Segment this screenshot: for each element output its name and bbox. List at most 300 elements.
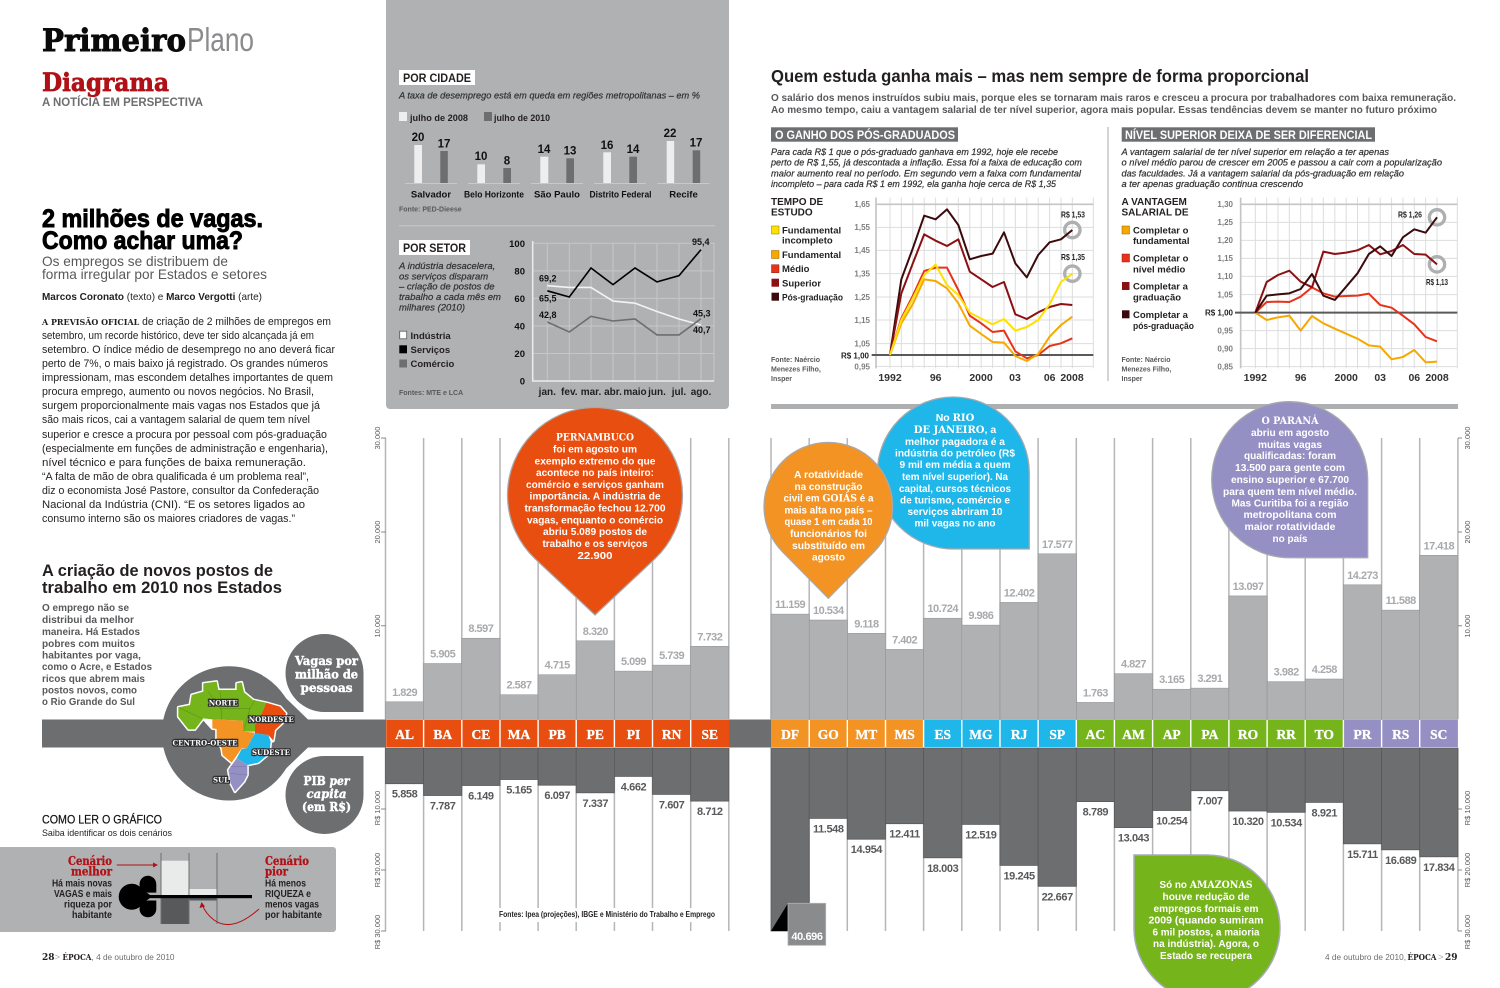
footer left: , 4 de outubro de 2010 <box>92 952 175 962</box>
footer right: ÉPOCA <box>1408 951 1437 963</box>
callout: Paraná: ensino superior e 67.700 <box>1231 474 1349 486</box>
footer right <box>1325 951 1458 963</box>
worse scenario text: pior <box>265 865 289 879</box>
state tiles: BA <box>433 727 452 742</box>
bar chart: vagas por milhão de pessoas: 4.827 <box>1121 659 1146 671</box>
callout tag: DF off-scale value: 40.696 <box>791 931 823 943</box>
line chart: por setor: mar. <box>581 387 602 398</box>
legend: vantagem salarial: Completar a <box>1133 310 1189 321</box>
line chart: vantagem salarial: 0,85 <box>1217 362 1234 372</box>
worse scenario text: Há menos <box>265 878 306 890</box>
subheading: Os empregos se distribuem de <box>42 253 228 269</box>
chart intro text: O emprego não se <box>42 602 129 614</box>
worse scenario text <box>265 854 322 921</box>
line chart: por setor: jul. <box>671 387 686 398</box>
legend: tempo de estudo <box>771 197 843 304</box>
description <box>770 147 1082 190</box>
state tiles: RN <box>662 727 682 742</box>
callout: Rio de Janeiro: melhor pagadora é a <box>905 436 1005 448</box>
footer left: 28 <box>42 953 55 963</box>
line chart: ganho por escolaridade: 1,45 <box>854 246 871 255</box>
line chart: por setor: 42,8 <box>539 310 557 320</box>
callout: Paraná: abriu em agosto <box>1251 427 1329 439</box>
state tiles: AM <box>1122 727 1145 742</box>
better scenario text: Há mais novas <box>52 878 112 890</box>
panel: unemployment <box>386 0 729 409</box>
body text: setembro, um recorde histórico, deve ter sido alcançada já em <box>42 330 314 342</box>
source: PED-Dieese: Fonte: PED-Dieese <box>399 207 462 214</box>
callout: Rio de Janeiro: tem nível superior). Na <box>902 471 1008 483</box>
panel: pós-graduados <box>770 127 1093 384</box>
line chart: ganho por escolaridade: 1992 <box>878 372 902 384</box>
footer right: > <box>1438 952 1444 963</box>
legend bubble: Vagas por milhão de pessoas: milhão de <box>295 668 358 682</box>
state tiles: RO <box>1238 727 1258 742</box>
callout: Paraná: Mas Curitiba foi a região <box>1232 498 1348 510</box>
legend: vantagem salarial: Completar o <box>1133 254 1189 264</box>
description: a ter apenas graduação continua crescendo <box>1122 179 1303 190</box>
byline: Marcos Coronato (texto) e Marco Vergotti (arte) <box>42 291 262 303</box>
intro: education and pay: O salário dos menos instruídos subiu mais, porque eles se tornaram mais raros e cresceu a procura por trabalhadores com baixa remuneração. <box>771 92 1456 104</box>
legend: tempo de estudo: ESTUDO <box>771 208 813 218</box>
line chart: ganho por escolaridade: 1,55 <box>854 223 871 232</box>
state tiles: PE <box>587 727 604 742</box>
description: por setor: – criação de postos de <box>398 282 495 292</box>
worse scenario text: Cenário <box>265 854 309 868</box>
callout tag: DF off-scale value <box>771 903 826 945</box>
body text: nível técnico e para funções de baixa remuneração. <box>42 457 306 469</box>
callout: Pernambuco: PERNAMBUCO <box>556 433 634 444</box>
axis: upper left scale: 10.000 <box>373 615 382 637</box>
line chart: vantagem salarial: 1,20 <box>1217 236 1234 245</box>
bar chart: por cidade: Belo Horizonte <box>464 190 524 200</box>
callout: Pernambuco: trabalho e os serviços <box>542 538 648 550</box>
callout: Goiás: agosto <box>812 552 845 564</box>
bar chart: vagas por milhão de pessoas: 4.715 <box>545 660 570 672</box>
line chart: ganho por escolaridade: 1,25 <box>854 293 871 302</box>
description: Para cada R$ 1 que o pós-graduado ganhava em 1992, hoje ele recebe <box>771 147 1058 158</box>
footer right: 29 <box>1445 953 1458 963</box>
description: por setor <box>398 261 501 313</box>
legend: vantagem salarial: Completar o <box>1133 226 1189 236</box>
legend: vantagem salarial: pós-graduação <box>1133 321 1194 332</box>
line chart: por setor: 0 <box>520 376 525 388</box>
line chart: ganho por escolaridade: 2000 <box>969 372 993 384</box>
callout: Rio de Janeiro: serviços abriram 10 <box>908 506 1003 518</box>
legend: years: julho de 2008 <box>409 113 468 124</box>
bar chart: por cidade: Recife <box>669 190 698 200</box>
bar chart: vagas por milhão de pessoas: 5.905 <box>430 648 456 660</box>
chart heading: states: A criação de novos postos de <box>42 562 273 580</box>
axis: lower right scale: R$ 30.000 <box>1463 915 1472 949</box>
callout: Goiás: mais alta no país – <box>784 504 873 516</box>
callout: Goiás: funcionários foi <box>790 528 867 540</box>
callout: Pernambuco: foi em agosto um <box>553 444 637 456</box>
bar chart: por cidade: 20 <box>412 132 424 144</box>
how to read heading <box>42 812 172 839</box>
central axis band <box>42 720 771 748</box>
callout: Rio de Janeiro: de turismo, comércio e <box>900 494 1010 506</box>
heading: por setor: POR SETOR <box>403 241 466 255</box>
state tiles: AP <box>1163 727 1181 742</box>
description: por setor: os serviços disparam <box>399 271 488 282</box>
legend: vantagem salarial: nível médio <box>1133 264 1185 276</box>
bar chart: vagas por milhão de pessoas: 14.273 <box>1347 570 1378 582</box>
description: incompleto – para cada R$ 1 em 1992, ela ganha hoje cerca de R$ 1,35 <box>771 179 1057 190</box>
bar chart: PIB per capita: 7.007 <box>1197 796 1223 808</box>
subheading: forma irregular por Estados e setores <box>42 266 267 282</box>
bar chart: vagas por milhão de pessoas: 3.291 <box>1197 673 1223 685</box>
bar chart: PIB per capita: 7.607 <box>659 799 685 811</box>
bar chart: vagas por milhão de pessoas: 17.418 <box>1423 540 1454 552</box>
section title: Diagrama: A NOTÍCIA EM PERSPECTIVA <box>42 94 203 109</box>
how to read heading: Saiba identificar os dois cenários <box>42 828 172 839</box>
line chart: ganho por escolaridade: 06 <box>1044 372 1056 384</box>
legend bubble: PIB per capita: capita <box>306 787 346 801</box>
bar chart: vagas por milhão de pessoas: 13.097 <box>1233 581 1264 593</box>
legend: vantagem salarial <box>1122 197 1194 332</box>
bar chart: por cidade: 17 <box>690 138 702 150</box>
callout: Amazonas: 6 mil postos, a maioria <box>1152 926 1260 938</box>
callout: Paraná: qualificadas: foram <box>1244 450 1336 462</box>
callout: Rio de Janeiro: mil vagas no ano <box>914 518 996 530</box>
line chart: vantagem salarial: 2000 <box>1335 372 1358 384</box>
line chart: vantagem salarial: R$ 1,26 <box>1398 209 1422 219</box>
chart heading: states <box>42 562 282 597</box>
legend: sectors <box>399 331 455 370</box>
description: por setor: A indústria desacelera, <box>398 261 495 272</box>
how to read heading: COMO LER O GRÁFICO <box>42 812 162 826</box>
bar chart: por cidade <box>405 128 709 200</box>
bar chart: vagas por milhão de pessoas: 3.982 <box>1274 667 1299 679</box>
bar chart: vagas por milhão de pessoas: 5.739 <box>659 650 684 662</box>
axis: lower left scale: R$ 20.000 <box>373 853 382 887</box>
intro: education and pay: Ao mesmo tempo, caiu a vantagem salarial de ter nível superior, agora mais popular. Essas tendências devem se manter no futuro próximo <box>771 104 1437 116</box>
chart intro text: habitantes por vaga, <box>42 650 141 662</box>
line chart: vantagem salarial: 1,30 <box>1217 200 1234 209</box>
axis: upper left scale: 20.000 <box>373 521 382 543</box>
bar chart: PIB per capita: 10.534 <box>1271 817 1303 829</box>
description: por setor: milhares (2010) <box>399 302 465 313</box>
legend: vantagem salarial: fundamental <box>1133 236 1189 247</box>
bar chart: vagas por milhão de pessoas: 11.159 <box>775 599 805 611</box>
bar chart: PIB per capita: 6.149 <box>468 790 494 802</box>
bar chart: vagas por milhão de pessoas: 1.829 <box>392 687 417 699</box>
legend bubble: PIB per capita: PIB per <box>304 774 351 788</box>
state tiles: SP <box>1049 727 1065 742</box>
callout: Rio de Janeiro: DE JANEIRO, a <box>914 424 996 436</box>
line chart: vantagem salarial: 96 <box>1295 372 1307 384</box>
axis: lower right scale <box>1458 791 1472 949</box>
bar chart: PIB per capita <box>386 748 1458 931</box>
state tiles: PI <box>627 727 640 742</box>
chart intro text: pobres com muitos <box>42 638 135 650</box>
line chart: vantagem salarial: 1,15 <box>1217 254 1234 263</box>
axis: upper right scale: 10.000 <box>1463 615 1472 637</box>
panel: how to read <box>0 847 336 932</box>
callout: Pernambuco: vagas, enquanto o comércio <box>527 514 663 526</box>
line chart: ganho por escolaridade: 1,15 <box>854 316 871 325</box>
line chart: ganho por escolaridade <box>841 198 1093 384</box>
legend bubble: PIB per capita <box>286 756 364 834</box>
callout: Rio de Janeiro: No RIO <box>936 412 975 424</box>
source: Fonte: Naércio <box>1122 357 1171 364</box>
state tiles: MG <box>969 727 993 742</box>
bar chart: PIB per capita: 12.519 <box>965 829 997 841</box>
line chart: ganho por escolaridade: 96 <box>930 372 942 384</box>
legend: vantagem salarial: graduação <box>1133 292 1181 304</box>
line chart: por setor: fev. <box>561 387 578 398</box>
headline: 2 milhões de vagas. <box>42 205 263 233</box>
source: Insper <box>771 376 792 383</box>
bar chart: PIB per capita: 8.712 <box>697 806 723 818</box>
callout: Rio de Janeiro: indústria do petróleo (R$ <box>895 448 1015 460</box>
state tiles: SC <box>1430 727 1447 742</box>
bar chart: vagas por milhão de pessoas: 8.597 <box>468 623 494 635</box>
bar chart: vagas por milhão de pessoas: 3.165 <box>1159 674 1185 686</box>
legend: years: julho de 2010 <box>493 113 550 124</box>
body text: são mais ricos, cai a vantagem salarial de quem tem nível <box>42 414 310 426</box>
headline <box>42 205 263 255</box>
bar chart: vagas por milhão de pessoas: 5.099 <box>621 656 646 668</box>
state tiles: MA <box>508 727 530 742</box>
bar chart: vagas por milhão de pessoas: 7.732 <box>697 631 723 643</box>
bar chart: PIB per capita: 16.689 <box>1385 855 1417 867</box>
legend: tempo de estudo: Superior <box>782 278 821 290</box>
bar chart: vagas por milhão de pessoas: 17.577 <box>1042 539 1073 551</box>
line chart: por setor: 65,5 <box>539 294 557 304</box>
line chart: vantagem salarial: 1,10 <box>1217 272 1234 281</box>
heading: NÍVEL SUPERIOR DEIXA DE SER DIFERENCIAL <box>1125 127 1372 142</box>
line chart: ganho por escolaridade: 1,65 <box>854 200 871 209</box>
body text: impressionam, mas escondem detalhes importantes de quem <box>42 372 333 384</box>
map labels: SUL <box>213 776 230 784</box>
body text: Nacional da Indústria (CNI). “E os setores ligados ao <box>42 499 305 511</box>
callout: Pernambuco: acontece no país inteiro: <box>536 467 654 479</box>
bar chart: por cidade: 16 <box>601 140 613 152</box>
map labels: CENTRO-OESTE <box>172 739 238 748</box>
chart intro text: postos novos, como <box>42 684 137 696</box>
bar chart: vagas por milhão de pessoas: 9.986 <box>968 610 994 622</box>
bar chart: por cidade: 8 <box>504 156 511 168</box>
source note: Fontes: Ipea (projeções), IBGE e Ministério do Trabalho e Emprego <box>499 910 715 919</box>
body text: “A falta de mão de obra qualificada é um problema real”, <box>42 471 309 483</box>
bar chart: por cidade: Distrito Federal <box>590 190 652 200</box>
callout: Pernambuco <box>508 408 683 615</box>
line chart: por setor: 100 <box>509 239 525 250</box>
heading: por cidade: POR CIDADE <box>403 71 471 85</box>
line chart: por setor: 69,2 <box>539 274 557 284</box>
worse scenario text: RIQUEZA e <box>265 889 311 900</box>
callout: Goiás: civil em GOIÁS é a <box>784 493 874 505</box>
callout: Goiás: na construção <box>794 481 862 493</box>
subheading <box>42 253 267 282</box>
chart intro text: distribui da melhor <box>42 614 134 626</box>
body text: (especialmente em funções de administração e engenharia), <box>42 443 328 455</box>
callout: Paraná: 13.500 para gente com <box>1235 462 1345 474</box>
title: education and pay: Quem estuda ganha mais – mas nem sempre de forma proporcional <box>771 66 1309 86</box>
state tiles <box>386 720 1458 747</box>
better scenario text: riqueza por <box>64 900 112 910</box>
description: o nível médio parou de crescer em 2005 e passou a cair com a popularização <box>1122 158 1442 169</box>
legend bubble: PIB per capita: (em R$) <box>302 800 351 814</box>
callout: Amazonas: empregos formais em <box>1154 903 1258 915</box>
bar chart: vagas por milhão de pessoas <box>386 539 1458 720</box>
section header: Primeiro Plano: Primeiro <box>42 23 186 59</box>
line chart: ganho por escolaridade: 1,35 <box>854 270 871 278</box>
bar chart: PIB per capita: 12.411 <box>889 829 920 841</box>
callout: Paraná: maior rotatividade <box>1244 521 1336 533</box>
bar chart: PIB per capita: 10.320 <box>1232 816 1264 828</box>
arrow: better scenario <box>117 862 158 868</box>
state tiles: PA <box>1201 727 1219 742</box>
callout: Amazonas: Só no AMAZONAS <box>1160 879 1252 891</box>
section header: Primeiro Plano <box>42 21 254 59</box>
better scenario text: Cenário <box>68 854 112 868</box>
state tiles: CE <box>472 727 490 742</box>
source: Insper <box>1122 376 1143 383</box>
line chart: ganho por escolaridade: 03 <box>1009 372 1021 384</box>
bar chart: PIB per capita: 14.954 <box>851 844 883 856</box>
legend: tempo de estudo: TEMPO DE <box>771 197 824 208</box>
bar chart: PIB per capita: 5.165 <box>506 784 532 796</box>
bar chart: vagas por milhão de pessoas: 10.534 <box>813 605 845 617</box>
headline: Como achar uma? <box>42 227 243 255</box>
source <box>1122 357 1171 383</box>
line chart: vantagem salarial: 06 <box>1408 372 1420 384</box>
description: A vantagem salarial de ter nível superior em relação a ter apenas <box>1121 147 1389 158</box>
worse scenario text: por habitante <box>265 910 322 921</box>
state tiles: RJ <box>1011 727 1028 742</box>
description: por cidade: A taxa de desemprego está em queda em regiões metropolitanas – em % <box>398 90 701 102</box>
source <box>771 357 821 383</box>
legend: vantagem salarial: Completar a <box>1133 282 1189 292</box>
body text: procura emprego, aumento ou novos negócios. No Brasil, <box>42 386 314 398</box>
bar chart: por cidade: 13 <box>564 146 576 158</box>
better scenario text: habitante <box>72 910 112 921</box>
bar chart: PIB per capita: 18.003 <box>927 863 959 875</box>
line chart: por setor: 40 <box>514 322 525 332</box>
callout: Pernambuco: 22.900 <box>578 550 613 562</box>
bar chart: PIB per capita: 13.043 <box>1118 833 1149 845</box>
line chart: por setor: maio <box>623 387 647 398</box>
description: perto de R$ 1,55, já descontada a inflação. Essa foi a faixa de educação com <box>770 158 1082 169</box>
bar chart: vagas por milhão de pessoas: 4.258 <box>1312 664 1337 676</box>
chart intro text: como o Acre, e Estados <box>42 661 152 673</box>
state tiles: PR <box>1354 727 1372 742</box>
axis: lower left scale: R$ 30.000 <box>373 915 382 949</box>
callout: Goiás: A rotatividade <box>794 469 863 481</box>
legend: tempo de estudo: Pós-graduação <box>782 292 843 304</box>
state tiles: AC <box>1086 727 1105 742</box>
line chart: por setor: abr. <box>604 387 622 398</box>
body text: setembro. O índice médio de desemprego no ano deverá ficar <box>42 344 335 356</box>
callout: Amazonas: na indústria). Agora, o <box>1153 938 1259 950</box>
state tiles: GO <box>818 727 839 742</box>
line chart: por setor: 95,4 <box>692 237 710 247</box>
bar chart: vagas por milhão de pessoas: 10.724 <box>927 603 959 615</box>
bar chart: vagas por milhão de pessoas: 1.763 <box>1083 687 1108 699</box>
callout: Pernambuco: abriu 5.089 postos de <box>543 526 647 538</box>
line chart: ganho por escolaridade: R$ 1,00 <box>841 352 870 360</box>
legend: tempo de estudo: Fundamental <box>782 250 841 261</box>
state tiles: RS <box>1392 727 1409 742</box>
state tiles: AL <box>395 727 414 742</box>
callout: Goiás: quase 1 em cada 10 <box>784 516 873 528</box>
map labels: SUDESTE <box>252 748 290 757</box>
bar chart: PIB per capita: 10.254 <box>1156 816 1189 828</box>
state tiles: ES <box>934 727 951 742</box>
state tiles: PB <box>549 727 566 742</box>
chart intro text: ricos que abrem mais <box>42 673 145 685</box>
map: Brazil regions <box>178 682 286 792</box>
callout: Paraná: O PARANÁ <box>1262 415 1319 427</box>
chart intro text: o Rio Grande do Sul <box>42 696 135 708</box>
line chart: vantagem salarial: 1,05 <box>1217 290 1234 300</box>
axis: upper right scale: 30.000 <box>1463 427 1472 449</box>
axis: upper left scale <box>373 427 386 637</box>
line chart: por setor: 20 <box>514 349 525 360</box>
line chart: ganho por escolaridade: 1,05 <box>854 340 871 348</box>
section title: Diagrama: Diagrama <box>42 68 169 97</box>
bar chart: vagas por milhão de pessoas: 12.402 <box>1004 587 1035 599</box>
arrow: worse scenario <box>200 902 259 925</box>
bar chart: por cidade: 22 <box>664 128 676 140</box>
line chart: por setor: jun. <box>647 387 666 398</box>
source: Menezes Filho, <box>771 366 821 374</box>
description: das faculdades. Já a vantagem salarial da pós-graduação em relação <box>1122 169 1404 180</box>
line chart: ganho por escolaridade: 0,95 <box>854 362 871 371</box>
line chart: vantagem salarial <box>1205 198 1457 384</box>
bar chart: vagas por milhão de pessoas: 11.588 <box>1386 595 1416 607</box>
bar chart: PIB per capita: 22.667 <box>1042 891 1073 903</box>
bar chart: por cidade: 14 <box>627 144 640 156</box>
mini chart diagram <box>119 853 252 924</box>
callout: Pernambuco: importância. A indústria de <box>530 490 661 502</box>
line chart: por setor <box>509 237 714 398</box>
bar chart: por cidade: 10 <box>475 151 487 163</box>
bar chart: PIB per capita: 8.789 <box>1083 807 1108 819</box>
heading: O GANHO DOS PÓS-GRADUADOS <box>775 127 955 142</box>
source: Fonte: Naércio <box>771 357 820 364</box>
body text: surgem proporcionalmente mais vagas nos Estados que já <box>42 400 321 412</box>
axis: lower right scale: R$ 20.000 <box>1463 853 1472 887</box>
legend: tempo de estudo: incompleto <box>782 236 833 246</box>
bar chart: PIB per capita: 6.097 <box>544 790 570 802</box>
legend bubble: Vagas por milhão de pessoas <box>286 634 364 712</box>
callout: Paraná: metropolitana com <box>1244 509 1336 521</box>
axis: upper left scale: 30.000 <box>373 427 382 449</box>
chart intro text: maneira. Há Estados <box>42 626 140 638</box>
description: maior aumento real no período. Em segundo vem a faixa com fundamental <box>771 169 1082 180</box>
callout: Goiás <box>764 442 893 598</box>
legend: tempo de estudo: Médio <box>782 264 810 275</box>
bar chart: PIB per capita: 15.711 <box>1347 849 1378 861</box>
chart intro text <box>42 602 152 708</box>
callout: Pernambuco: comércio e serviços ganham <box>526 479 664 491</box>
callout: Amazonas: houve redução de <box>1162 891 1250 903</box>
legend: tempo de estudo: Fundamental <box>782 226 841 236</box>
callout: Rio de Janeiro: capital, cursos técnicos <box>899 483 1011 495</box>
map labels: NORDESTE <box>249 715 294 724</box>
bar chart: por cidade: Salvador <box>411 190 451 200</box>
bar chart: por cidade: 17 <box>438 139 450 151</box>
body text: consumo interno são os maiores criadores de vagas.” <box>42 513 295 525</box>
map labels <box>172 698 294 784</box>
bar chart: vagas por milhão de pessoas: 2.587 <box>506 680 532 692</box>
bar chart: por cidade: São Paulo <box>534 190 580 200</box>
line chart: vantagem salarial: 0,90 <box>1217 344 1234 354</box>
